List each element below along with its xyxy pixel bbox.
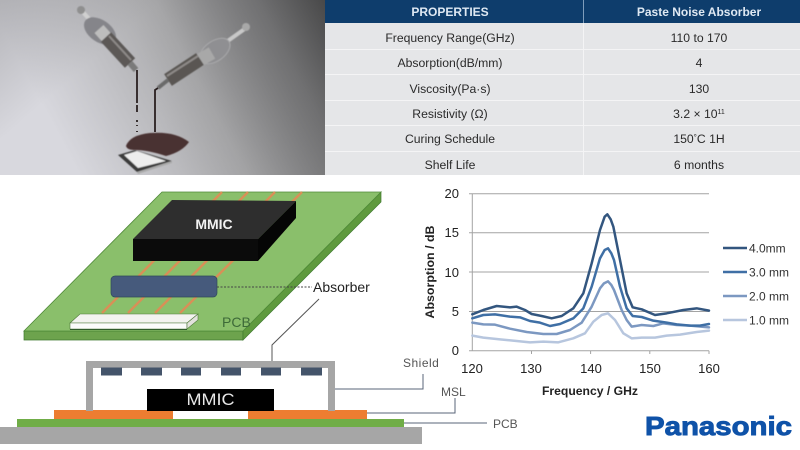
legend	[723, 242, 789, 328]
y axis numbers: 5	[452, 304, 459, 319]
y axis numbers: 0	[452, 343, 459, 358]
table: properties	[325, 0, 800, 175]
icon: paste blob	[126, 133, 189, 156]
line chart: absorption vs frequency	[423, 186, 789, 398]
data curves	[472, 214, 709, 342]
absorber block	[111, 276, 217, 297]
callouts: shield, MSL, PCB	[335, 356, 518, 431]
x axis numbers: 120	[461, 361, 483, 376]
table rows: Absorption(dB/mm)	[398, 56, 502, 70]
x axis numbers	[461, 361, 720, 376]
curve: 4.0mm	[472, 214, 709, 318]
y axis title: Absorption / dB	[423, 225, 437, 318]
MSL right	[248, 410, 367, 419]
icon: right paste stream	[155, 88, 158, 132]
legend: 2.0 mm	[749, 290, 789, 304]
table rows: Resistivity (Ω)	[412, 107, 488, 121]
x axis numbers: 150	[639, 361, 661, 376]
diagram: 3D PCB with MMIC and absorber	[24, 192, 381, 340]
callouts: shield, MSL, PCB: PCB	[493, 417, 518, 431]
photo: syringes dispensing paste onto a chip	[0, 0, 325, 175]
shield	[86, 361, 335, 411]
table rows: 130	[689, 82, 709, 96]
curve: 3.0mm	[472, 248, 709, 326]
absorber pads	[101, 368, 322, 376]
table rows: 6 months	[674, 158, 724, 172]
y axis numbers	[445, 186, 459, 358]
callouts: shield, MSL, PCB: MSL	[441, 385, 466, 399]
table header: PROPERTIES	[411, 5, 489, 19]
orange traces	[102, 192, 302, 313]
legend: 3.0 mm	[749, 266, 789, 280]
table rows: 3.2 × 10	[673, 107, 718, 121]
y axis numbers: 20	[445, 186, 459, 201]
logo: Panasonic: Panasonic	[645, 411, 792, 441]
table rows: Frequency Range(GHz)	[385, 31, 515, 45]
icon: left paste drip	[136, 70, 138, 132]
icon: chip under paste	[118, 150, 172, 174]
MSL left	[54, 410, 173, 419]
table rows: 150	[673, 132, 694, 146]
callout: absorber: Absorber	[313, 279, 370, 295]
y axis numbers: 10	[445, 265, 459, 280]
x axis numbers: 160	[698, 361, 720, 376]
table rows: Viscosity(Pa·s)	[409, 82, 491, 96]
PCB label: PCB	[222, 314, 251, 330]
legend: 1.0 mm	[749, 314, 789, 328]
table rows: 110 to 170	[671, 31, 728, 45]
table rows: 4	[696, 56, 703, 70]
y axis numbers: 15	[445, 225, 459, 240]
callouts: shield, MSL, PCB: Shield	[403, 356, 439, 370]
diagram: cross-section	[0, 361, 422, 444]
table rows: Curing Schedule	[405, 132, 495, 146]
icon: left syringe	[77, 6, 136, 70]
table rows: °	[694, 133, 697, 142]
table rows	[325, 23, 800, 175]
callout: absorber	[217, 279, 370, 372]
MMIC die: MMIC	[186, 390, 234, 409]
curve: 1.0mm	[472, 313, 709, 342]
white connector strip	[70, 314, 198, 330]
curve: 2.0mm	[472, 281, 709, 334]
MMIC chip: MMIC	[195, 216, 233, 232]
table rows: 11	[718, 109, 725, 116]
PCB layer	[17, 419, 404, 427]
MMIC chip	[133, 200, 296, 261]
PCB board	[24, 192, 381, 340]
x axis title: Frequency / GHz	[542, 384, 638, 398]
base	[0, 427, 422, 444]
grid lines	[469, 194, 709, 354]
MMIC die	[147, 389, 274, 411]
table rows: C 1H	[697, 132, 725, 146]
table header: Paste Noise Absorber	[637, 5, 761, 19]
icon: right syringe	[158, 23, 250, 88]
x axis numbers: 130	[520, 361, 542, 376]
legend: 4.0mm	[749, 242, 786, 256]
table header	[325, 0, 800, 23]
table rows: Shelf Life	[425, 158, 476, 172]
x axis numbers: 140	[580, 361, 602, 376]
